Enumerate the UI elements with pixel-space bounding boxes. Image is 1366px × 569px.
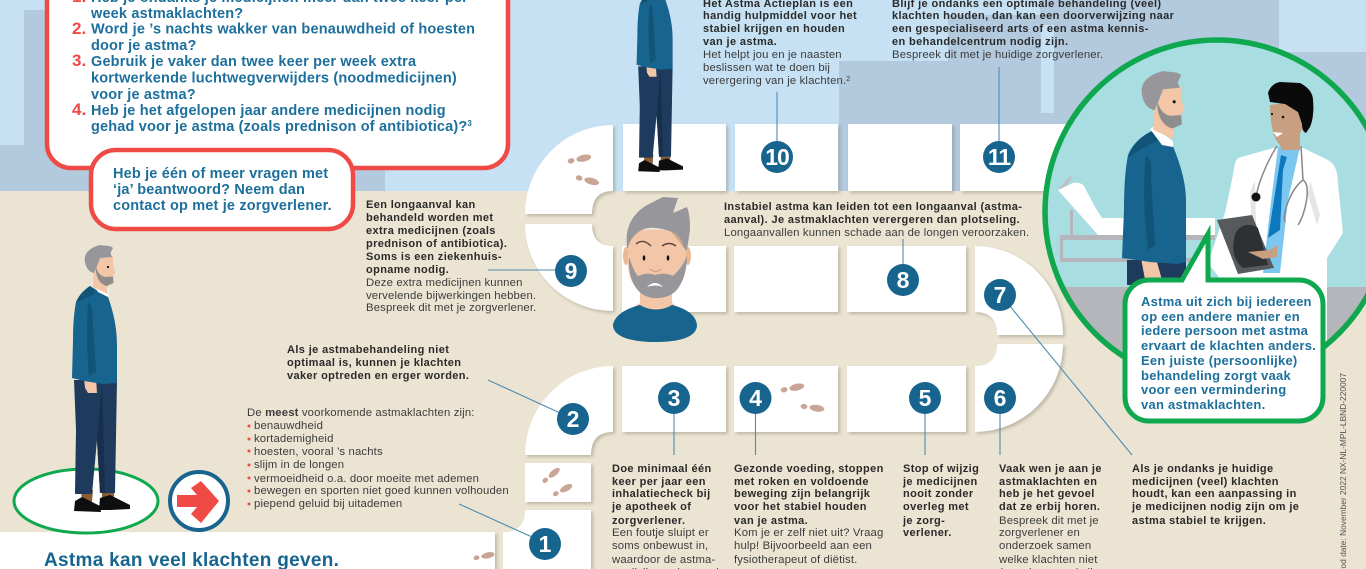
text block: step 8 [724, 201, 1029, 239]
list of common complaints [247, 407, 509, 510]
text block: step 8: Instabiel astma kan leiden tot een longaanval (astma- [724, 201, 1022, 213]
number markers: 3 [668, 385, 680, 411]
numbered question 3: voor je astma? [91, 87, 196, 103]
text block: step 3: Een foutje sluipt er [612, 527, 709, 539]
numbered question 4 [72, 100, 472, 135]
number markers: 4 [749, 385, 762, 411]
text block: step 6: zorgverlener en [999, 527, 1080, 539]
text block: step 6: dat ze erbij horen. [999, 501, 1100, 513]
callout: green speech bubble: behandeling zorgt vaak [1141, 368, 1291, 383]
text block: step 5: verlener. [903, 527, 952, 539]
list of common complaints: kortademigheid [254, 433, 334, 445]
text block: step 5 [902, 463, 979, 539]
worried man portrait [613, 197, 697, 342]
text block: step 5: je medicijnen [902, 476, 978, 488]
doctor [1210, 82, 1343, 342]
numbered question 4: 3 [467, 119, 472, 128]
text block: step 7 [1131, 463, 1299, 527]
callout: green speech bubble: van astmaklachten. [1141, 397, 1265, 412]
callout: green speech bubble: ervaart de klachten anders. [1141, 338, 1316, 353]
text block: step 5: Stop of wijzig [903, 463, 979, 475]
callout: green speech bubble: op een andere manier en [1141, 309, 1300, 324]
green start ellipse [14, 469, 158, 533]
text block: step 3: je apotheek of [611, 501, 691, 513]
text block: step 3 [611, 463, 719, 569]
text block: step 11: klachten houden, dan kan een doorverwijzing naar [892, 10, 1175, 22]
text block: step 4: voor het stabiel houden [734, 501, 867, 513]
text block: step 3: soms onbewust in, [612, 540, 708, 552]
numbered question 1 [72, 0, 468, 22]
number markers: 1 [539, 531, 552, 557]
text block: step 2: Als je astmabehandeling niet [287, 344, 449, 356]
text block: step 11: Bespreek dit met je huidige zorgverlener. [892, 49, 1103, 61]
patient [1122, 71, 1186, 285]
text block: step 4: fysiotherapeut of diëtist. [734, 554, 857, 566]
numbered question 4: Heb je het afgelopen jaar andere medicijnen nodig [91, 103, 446, 119]
standing man on top row [637, 0, 683, 172]
connector lines [459, 67, 1132, 537]
text block: step 2 [287, 344, 469, 382]
icon: red arrow in blue circle [170, 472, 228, 530]
text block: step 4: beweging zijn belangrijk [734, 488, 871, 500]
text block: step 10 [703, 0, 857, 87]
text block: step 8: aanval). Je astmaklachten verergeren dan plotseling. [724, 214, 1020, 226]
text block: step 6: welke klachten niet [998, 554, 1098, 566]
callout: green speech bubble: voor een vermindering [1141, 382, 1286, 397]
list of common complaints: hoesten, vooral ’s nachts [254, 446, 383, 458]
callout: green speech bubble: Astma uit zich bij iedereen [1141, 294, 1312, 309]
list of common complaints: De meest voorkomende astmaklachten zijn: [247, 407, 475, 419]
text block: step 9 [366, 199, 536, 314]
hospital bed [1058, 176, 1215, 262]
numbered question 1: week astmaklachten? [90, 6, 243, 22]
text block: step 10: Het helpt jou en je naasten [703, 49, 842, 61]
text block: step 10: van je astma. [703, 36, 777, 48]
text block: step 9: Deze extra medicijnen kunnen [366, 277, 523, 289]
callout: contact care provider: Heb je één of meer vragen met [113, 166, 328, 182]
numbered question 4: gehad voor je astma (zoals prednison of antibiotica)? [91, 119, 467, 135]
text block: step 6 [998, 463, 1103, 569]
text block: step 8: Longaanvallen kunnen schade aan de longen veroorzaken. [724, 227, 1029, 239]
number markers: 9 [565, 258, 577, 284]
text block: step 3: Doe minimaal één [612, 463, 712, 475]
text block: step 10: verergering van je klachten. [703, 75, 846, 87]
numbered question 3: 3. [72, 51, 86, 70]
text block: step 11 [892, 0, 1175, 61]
number markers [529, 141, 1016, 560]
footprints on tiles [473, 153, 825, 561]
text block: step 2: optimaal is, kunnen je klachten [287, 357, 461, 369]
text block: step 9: prednison of antibiotica). [366, 238, 507, 250]
text block: step 3: zorgverlener. [612, 515, 685, 527]
number markers: 8 [897, 267, 910, 293]
text block: step 3: keer per jaar een [612, 476, 706, 488]
text block: step 9: Soms is een ziekenhuis- [366, 251, 502, 263]
text block: step 11: een gespecialiseerd arts of een astma kennis- [892, 23, 1149, 35]
text block: step 4: Kom je er zelf niet uit? Vraag [734, 527, 883, 539]
text block: step 2: vaker optreden en erger worden. [287, 370, 469, 382]
callout: contact care provider: ‘ja’ beantwoord? Neem dan [113, 182, 305, 198]
numbered question 4: 4. [72, 100, 86, 119]
number markers: 11 [988, 144, 1011, 170]
numbered question 3: Gebruik je vaker dan twee keer per week extra [91, 54, 417, 70]
top question box [47, 0, 508, 168]
text block: step 7: astma stabiel te krijgen. [1132, 515, 1266, 527]
text block: step 10: beslissen wat te doen bij [703, 62, 830, 74]
number markers: 10 [765, 144, 789, 170]
text block: step 7: houdt, kan een aanpassing in [1132, 488, 1297, 500]
text block: step 4: Gezonde voeding, stoppen [734, 463, 884, 475]
text block: step 9: behandeld worden met [366, 212, 493, 224]
list of common complaints: vermoeidheid o.a. door moeite met ademen [254, 473, 479, 485]
number markers: 5 [919, 385, 932, 411]
numbered question 2: door je astma? [91, 38, 197, 54]
text block: step 5: je zorg- [902, 515, 945, 527]
text block: step 9: vervelende bijwerkingen hebben. [366, 290, 536, 302]
text block: step 6: astmaklachten en [999, 476, 1097, 488]
circle scene: patient and doctor [1042, 37, 1366, 359]
text block: step 3: waardoor de astma- [611, 554, 715, 566]
number markers: 6 [994, 385, 1006, 411]
list of common complaints: slijm in de longen [254, 459, 344, 471]
text block: step 6: onderzoek samen [999, 540, 1091, 552]
standing man on green circle [14, 245, 158, 533]
text block: step 9: opname nodig. [366, 264, 449, 276]
text block: step 6: heb je het gevoel [999, 488, 1095, 500]
text block: step 4 [734, 463, 884, 566]
number markers: 2 [567, 406, 579, 432]
text block: step 10: handig hulpmiddel voor het [703, 10, 857, 22]
text block: step 7: je medicijnen nodig zijn om je [1131, 501, 1299, 513]
text block: step 11: en behandelcentrum nodig zijn. [892, 36, 1068, 48]
callout: green speech bubble: iedere persoon met astma [1141, 323, 1309, 338]
list of common complaints: piepend geluid bij uitademen [254, 498, 402, 510]
numbered question 2 [72, 19, 475, 54]
text block: step 7: medicijnen (veel) klachten [1132, 476, 1279, 488]
callout: green speech bubble: Een juiste (persoonlijke) [1141, 353, 1298, 368]
callout: green speech bubble [1125, 234, 1323, 421]
text block: step 10: 2 [846, 76, 850, 83]
text block: step 5: nooit zonder [903, 488, 974, 500]
text block: step 6: Vaak wen je aan je [999, 463, 1102, 475]
numbered question 2: Word je ’s nachts wakker van benauwdheid of hoesten [91, 22, 475, 38]
list of common complaints: benauwdheid [254, 420, 323, 432]
callout: contact care provider [91, 150, 353, 229]
numbered question 3: kortwerkende luchtwegverwijders (noodmedicijnen) [91, 70, 457, 86]
list of common complaints: bewegen en sporten niet goed kunnen volhouden [254, 485, 509, 497]
text block: step 4: met roken en voldoende [734, 476, 869, 488]
callout: contact care provider: contact op met je zorgverlener. [113, 198, 332, 214]
text block: step 5: overleg met [903, 501, 969, 513]
text block: step 9: extra medicijnen (zoals [366, 225, 496, 237]
text block: step 9: Bespreek dit met je zorgverlener. [366, 302, 536, 314]
game board path tiles [0, 124, 1070, 569]
numbered question 2: 2. [72, 19, 86, 38]
numbered question 3 [72, 51, 457, 103]
text block: step 4: van je astma. [734, 515, 808, 527]
text block: step 4: hulp! Bijvoorbeeld aan een [734, 540, 872, 552]
text block: step 6: Bespreek dit met je [999, 515, 1099, 527]
text block: step 3: inhalatiecheck bij [612, 488, 711, 500]
text block: step 7: Als je ondanks je huidige [1132, 463, 1274, 475]
text block: step 10: stabiel krijgen en houden [703, 23, 845, 35]
number markers: 7 [994, 282, 1006, 308]
x-ray clipboard [1217, 215, 1274, 274]
text block: step 9: Een longaanval kan [366, 199, 476, 211]
